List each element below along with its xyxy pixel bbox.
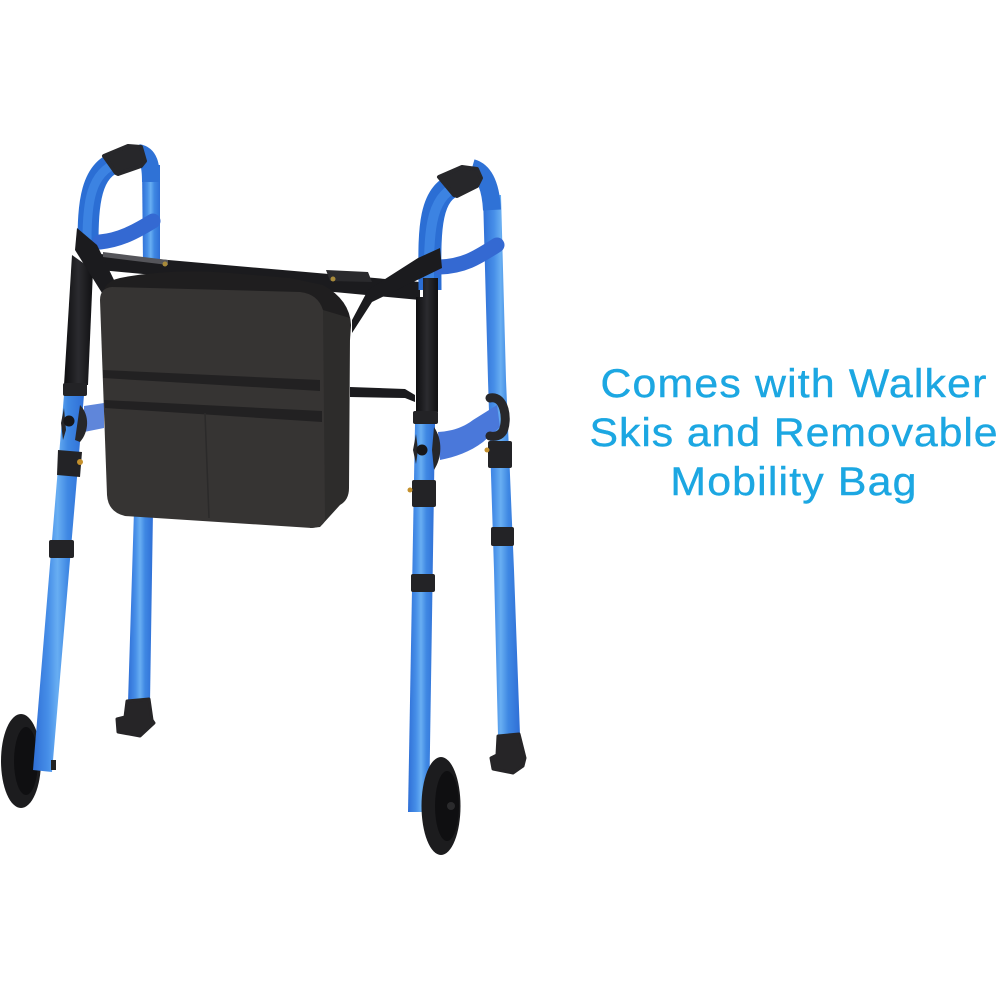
left handle tube [87, 153, 151, 245]
left hand grip [104, 146, 145, 174]
right front wheel [422, 757, 460, 855]
left front wheel [1, 714, 41, 808]
right hand grip [439, 167, 481, 196]
right front leg black upper [416, 278, 438, 412]
left rear leg [128, 510, 153, 702]
right leg clamps [411, 411, 514, 592]
caption text: Skis and Removable [590, 411, 998, 455]
left cross tube [100, 221, 153, 242]
brass pin [77, 459, 83, 465]
bag top gusset [105, 271, 351, 345]
right lower cross tube [438, 405, 500, 460]
left front leg black upper [64, 255, 93, 385]
left joint and bolt [61, 405, 87, 442]
left front leg blue [33, 395, 84, 772]
right rear foot [491, 734, 525, 773]
right cross tube [440, 245, 497, 267]
left leg clamps [49, 383, 87, 558]
caption text: Comes with Walker [600, 362, 988, 406]
left lower cross tube [84, 403, 104, 432]
left bag strap [75, 228, 115, 293]
bag front panel [100, 287, 325, 528]
left rear upright [142, 165, 160, 263]
left axle cap [51, 760, 56, 770]
right rear leg [483, 195, 520, 735]
top folding bar with latches [100, 252, 420, 300]
caption text: Mobility Bag [670, 460, 918, 504]
bag side panel [310, 310, 350, 528]
bag pocket seam [205, 413, 209, 518]
brass pins [408, 448, 490, 492]
right handle tube [429, 168, 492, 290]
rear cross bar [350, 387, 415, 402]
right bag strap [352, 248, 442, 333]
right curved clip [490, 398, 505, 436]
right joint and bolt [413, 427, 440, 470]
mobility bag [100, 271, 351, 528]
bag pocket bands [103, 370, 320, 391]
left rear foot [117, 699, 154, 736]
caption text [590, 362, 998, 504]
right front leg blue [408, 424, 435, 812]
